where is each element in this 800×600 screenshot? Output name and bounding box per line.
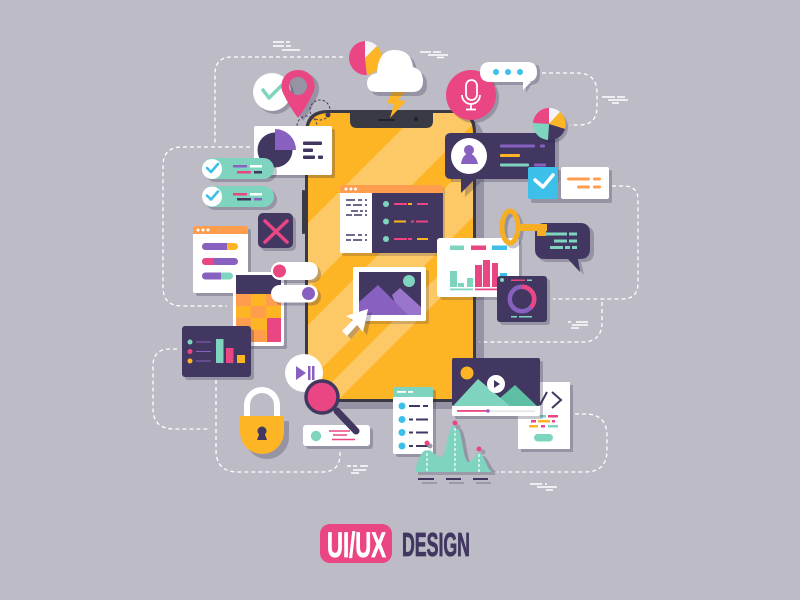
logo: UI/UX DESIGN: [320, 524, 470, 565]
magnifying glass: [306, 381, 356, 431]
phone glass reflection stripes: [308, 113, 473, 398]
cursor arrow: [342, 309, 372, 339]
map pin: [281, 70, 319, 121]
checklist pill two: [202, 186, 277, 210]
bar chart card: [182, 326, 254, 380]
notch: [350, 111, 433, 128]
code snippet card: [518, 382, 573, 452]
logo: UI/UX DESIGN: UI/UX: [327, 526, 386, 565]
padlock: [240, 390, 289, 459]
key icon: [502, 211, 547, 246]
logo: UI/UX DESIGN: DESIGN: [402, 526, 470, 563]
dashed circles at phone corner: [297, 100, 330, 136]
image card with mountains: [353, 267, 429, 324]
close button: [258, 213, 296, 251]
bar list card: [193, 226, 251, 296]
check circle: [253, 73, 294, 114]
pie chart card: [254, 126, 335, 178]
pie chart top: [349, 41, 382, 75]
list card: [393, 387, 436, 457]
profile message bubble: [445, 133, 559, 197]
checkbox card: [528, 167, 612, 203]
speech bubble with text: [535, 223, 594, 275]
checklist pill one: [202, 158, 277, 182]
search input card: [303, 425, 373, 449]
toggle switches: [271, 262, 321, 306]
cloud: [367, 50, 427, 96]
heatmap card: [233, 272, 287, 349]
UI/UX design infographic: [152, 41, 639, 563]
mountain area chart: [415, 420, 496, 483]
dashed connector lines: [153, 57, 638, 472]
microphone icon: [446, 70, 499, 123]
media play button: [285, 354, 323, 392]
code window on phone: [340, 185, 445, 256]
lightning bolt: [387, 92, 406, 118]
chat bubble with dots: [480, 62, 540, 93]
chart card: [437, 238, 522, 300]
video player card: [452, 358, 543, 419]
donut chart card: [497, 276, 550, 325]
pie chart right: [533, 108, 568, 143]
phone: [302, 110, 484, 409]
